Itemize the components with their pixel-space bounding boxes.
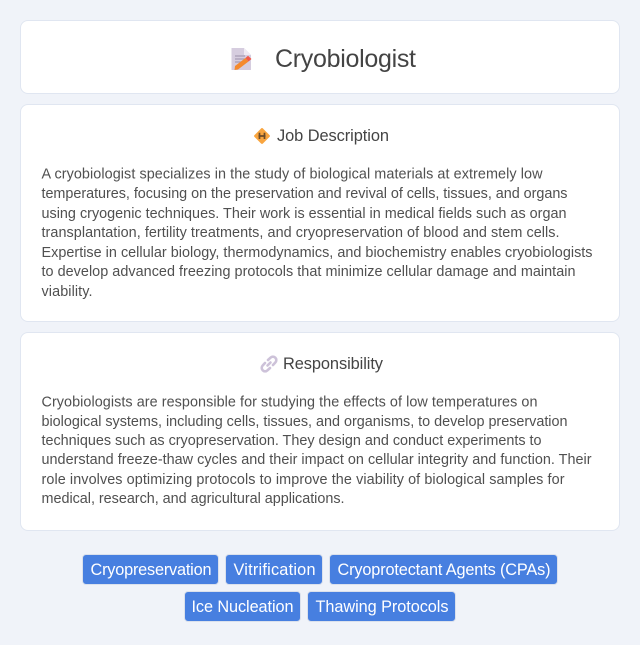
- text block: responsibility: medical, research, and agricultural applications.: [42, 491, 344, 507]
- icon: document with pencil: [232, 48, 252, 70]
- icon: chain link: [260, 355, 278, 373]
- panel: responsibility: [20, 332, 620, 531]
- text block: responsibility: Cryobiologists are responsible for studying the effects of low temperatures on: [42, 394, 538, 410]
- tag: Cryopreservation: Cryopreservation: [90, 561, 212, 579]
- text block: responsibility: [42, 394, 592, 507]
- tag: Ice Nucleation: [184, 591, 301, 622]
- text block: responsibility: biological systems, including cells, tissues, and organisms, to develop preservation: [42, 414, 568, 430]
- tag: Ice Nucleation: Ice Nucleation: [192, 598, 294, 616]
- heading: responsibility: Responsibility: [283, 355, 384, 373]
- text block: job description: A cryobiologist specializes in the study of biological materials at extremely low: [42, 166, 543, 182]
- text block: job description: [42, 166, 592, 300]
- icon: orange diamond sign: [254, 128, 270, 144]
- text block: responsibility: techniques such as cryopreservation. They design and conduct experiments to: [42, 433, 542, 449]
- tag list: [82, 554, 558, 622]
- title: Cryobiologist: [275, 45, 416, 73]
- tag: Cryoprotectant Agents (CPAs): [329, 554, 558, 585]
- text block: job description: to develop advanced freezing protocols that minimize cellular damage and maintain: [42, 264, 576, 280]
- heading: job description: Job Description: [277, 127, 389, 145]
- panel: title card: [20, 20, 620, 94]
- tag: Vitrification: Vitrification: [234, 561, 316, 579]
- text block: job description: transplantation, fertility treatments, and cryopreservation of blood and stem cells.: [42, 225, 560, 241]
- tag: Vitrification: [225, 554, 323, 585]
- tag: Cryoprotectant Agents (CPAs): Cryoprotectant Agents (CPAs): [338, 561, 550, 579]
- tag: Thawing Protocols: Thawing Protocols: [316, 598, 448, 616]
- text block: job description: temperatures, focusing on the preservation and revival of cells, tissues, and organs: [42, 186, 568, 202]
- text block: job description: using cryogenic techniques. Their work is essential in medical fields such as organ: [42, 206, 566, 222]
- panel: job description: [20, 104, 620, 322]
- tag: Cryopreservation: [82, 554, 219, 585]
- text block: job description: viability.: [42, 284, 92, 300]
- text block: responsibility: understand freeze-thaw cycles and their impact on cellular integrity and function. Their: [42, 452, 592, 468]
- tag: Thawing Protocols: [307, 591, 456, 622]
- text block: job description: Expertise in cellular biology, thermodynamics, and biochemistry enables cryobiologists: [42, 245, 592, 261]
- text block: responsibility: role involves optimizing protocols to improve the viability of biological samples for: [42, 472, 565, 488]
